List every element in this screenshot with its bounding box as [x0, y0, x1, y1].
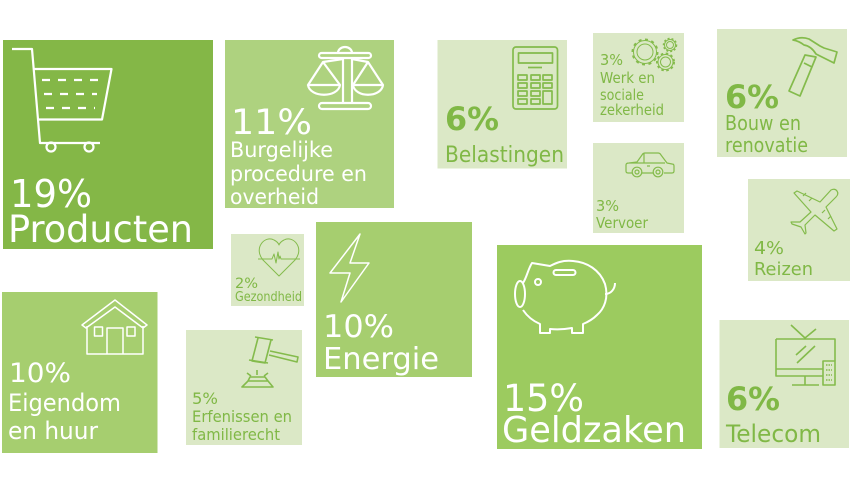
percentage: 11%: 11%	[231, 103, 312, 143]
icon: gavel	[242, 337, 298, 387]
percentage: 15%: 15%	[503, 377, 584, 420]
label: Energie: Energie	[323, 342, 439, 377]
label: Telecom: Telecom	[725, 420, 821, 448]
icon: television	[776, 325, 835, 385]
label: Eigendom en huur: en huur	[8, 417, 98, 445]
percentage: 10%: 10%	[9, 358, 71, 389]
panel: Telecom	[720, 320, 849, 448]
percentage: 6%: 6%	[445, 100, 499, 138]
panel: Werk en sociale zekerheid	[593, 33, 684, 122]
icon: gears	[632, 38, 676, 70]
icon: heart with pulse	[258, 239, 300, 276]
label: Belastingen: Belastingen	[445, 143, 564, 168]
percentage: 3%: 3%	[596, 197, 619, 215]
percentage: 6%: 6%	[726, 380, 780, 418]
label: Vervoer: Vervoer	[596, 214, 649, 232]
panel: Eigendom en huur	[2, 292, 158, 453]
percentage: 3%: 3%	[600, 51, 623, 69]
label: Bouw en renovatie: Bouw en	[725, 111, 801, 135]
label: Werk en sociale zekerheid: Werk en	[600, 69, 655, 87]
icon: house	[82, 300, 147, 354]
panel: Reizen	[748, 179, 850, 281]
label: Erfenissen en familierecht: familierecht	[192, 425, 280, 444]
percentage: 4%: 4%	[754, 238, 784, 259]
icon: scales	[308, 47, 383, 109]
label: Werk en sociale zekerheid: sociale	[600, 86, 644, 104]
label: Bouw en renovatie: renovatie	[725, 133, 808, 157]
icon: lightning bolt	[330, 234, 369, 302]
label: Gezondheid: Gezondheid	[235, 290, 302, 305]
label: Producten: Producten	[8, 208, 193, 251]
percentage: 10%: 10%	[323, 309, 394, 345]
panel: Geldzaken	[497, 245, 702, 451]
panel: Vervoer	[593, 143, 684, 233]
panel: Erfenissen en familierecht	[186, 330, 302, 445]
label: Eigendom en huur: Eigendom	[8, 389, 121, 417]
percentage: 5%: 5%	[192, 389, 218, 408]
label: Erfenissen en familierecht: Erfenissen en	[192, 407, 292, 426]
panel: Energie	[316, 222, 472, 377]
icon: hammer	[789, 38, 837, 96]
panel: Gezondheid	[231, 234, 304, 306]
panel: Producten	[3, 40, 213, 251]
percentage: 19%: 19%	[10, 172, 92, 216]
icon: airplane	[791, 189, 838, 234]
panel: Bouw en renovatie	[717, 29, 847, 157]
label: Reizen: Reizen	[754, 259, 813, 280]
icon: car	[626, 153, 674, 177]
icon: shopping cart	[12, 49, 112, 152]
label: Werk en sociale zekerheid: zekerheid	[600, 101, 664, 119]
percentage: 6%: 6%	[725, 78, 779, 116]
icon: calculator	[513, 47, 558, 109]
label: Geldzaken: Geldzaken	[502, 410, 686, 451]
panel: Burgelijke procedure en overheid	[225, 40, 394, 209]
label: Burgelijke procedure en overheid: overheid	[230, 185, 319, 209]
icon: piggy bank	[515, 261, 615, 333]
label: Burgelijke procedure en overheid: procedure en	[230, 162, 367, 186]
panel: Belastingen	[438, 40, 567, 168]
percentage: 2%: 2%	[235, 276, 258, 292]
label: Burgelijke procedure en overheid: Burgelijke	[230, 138, 333, 162]
